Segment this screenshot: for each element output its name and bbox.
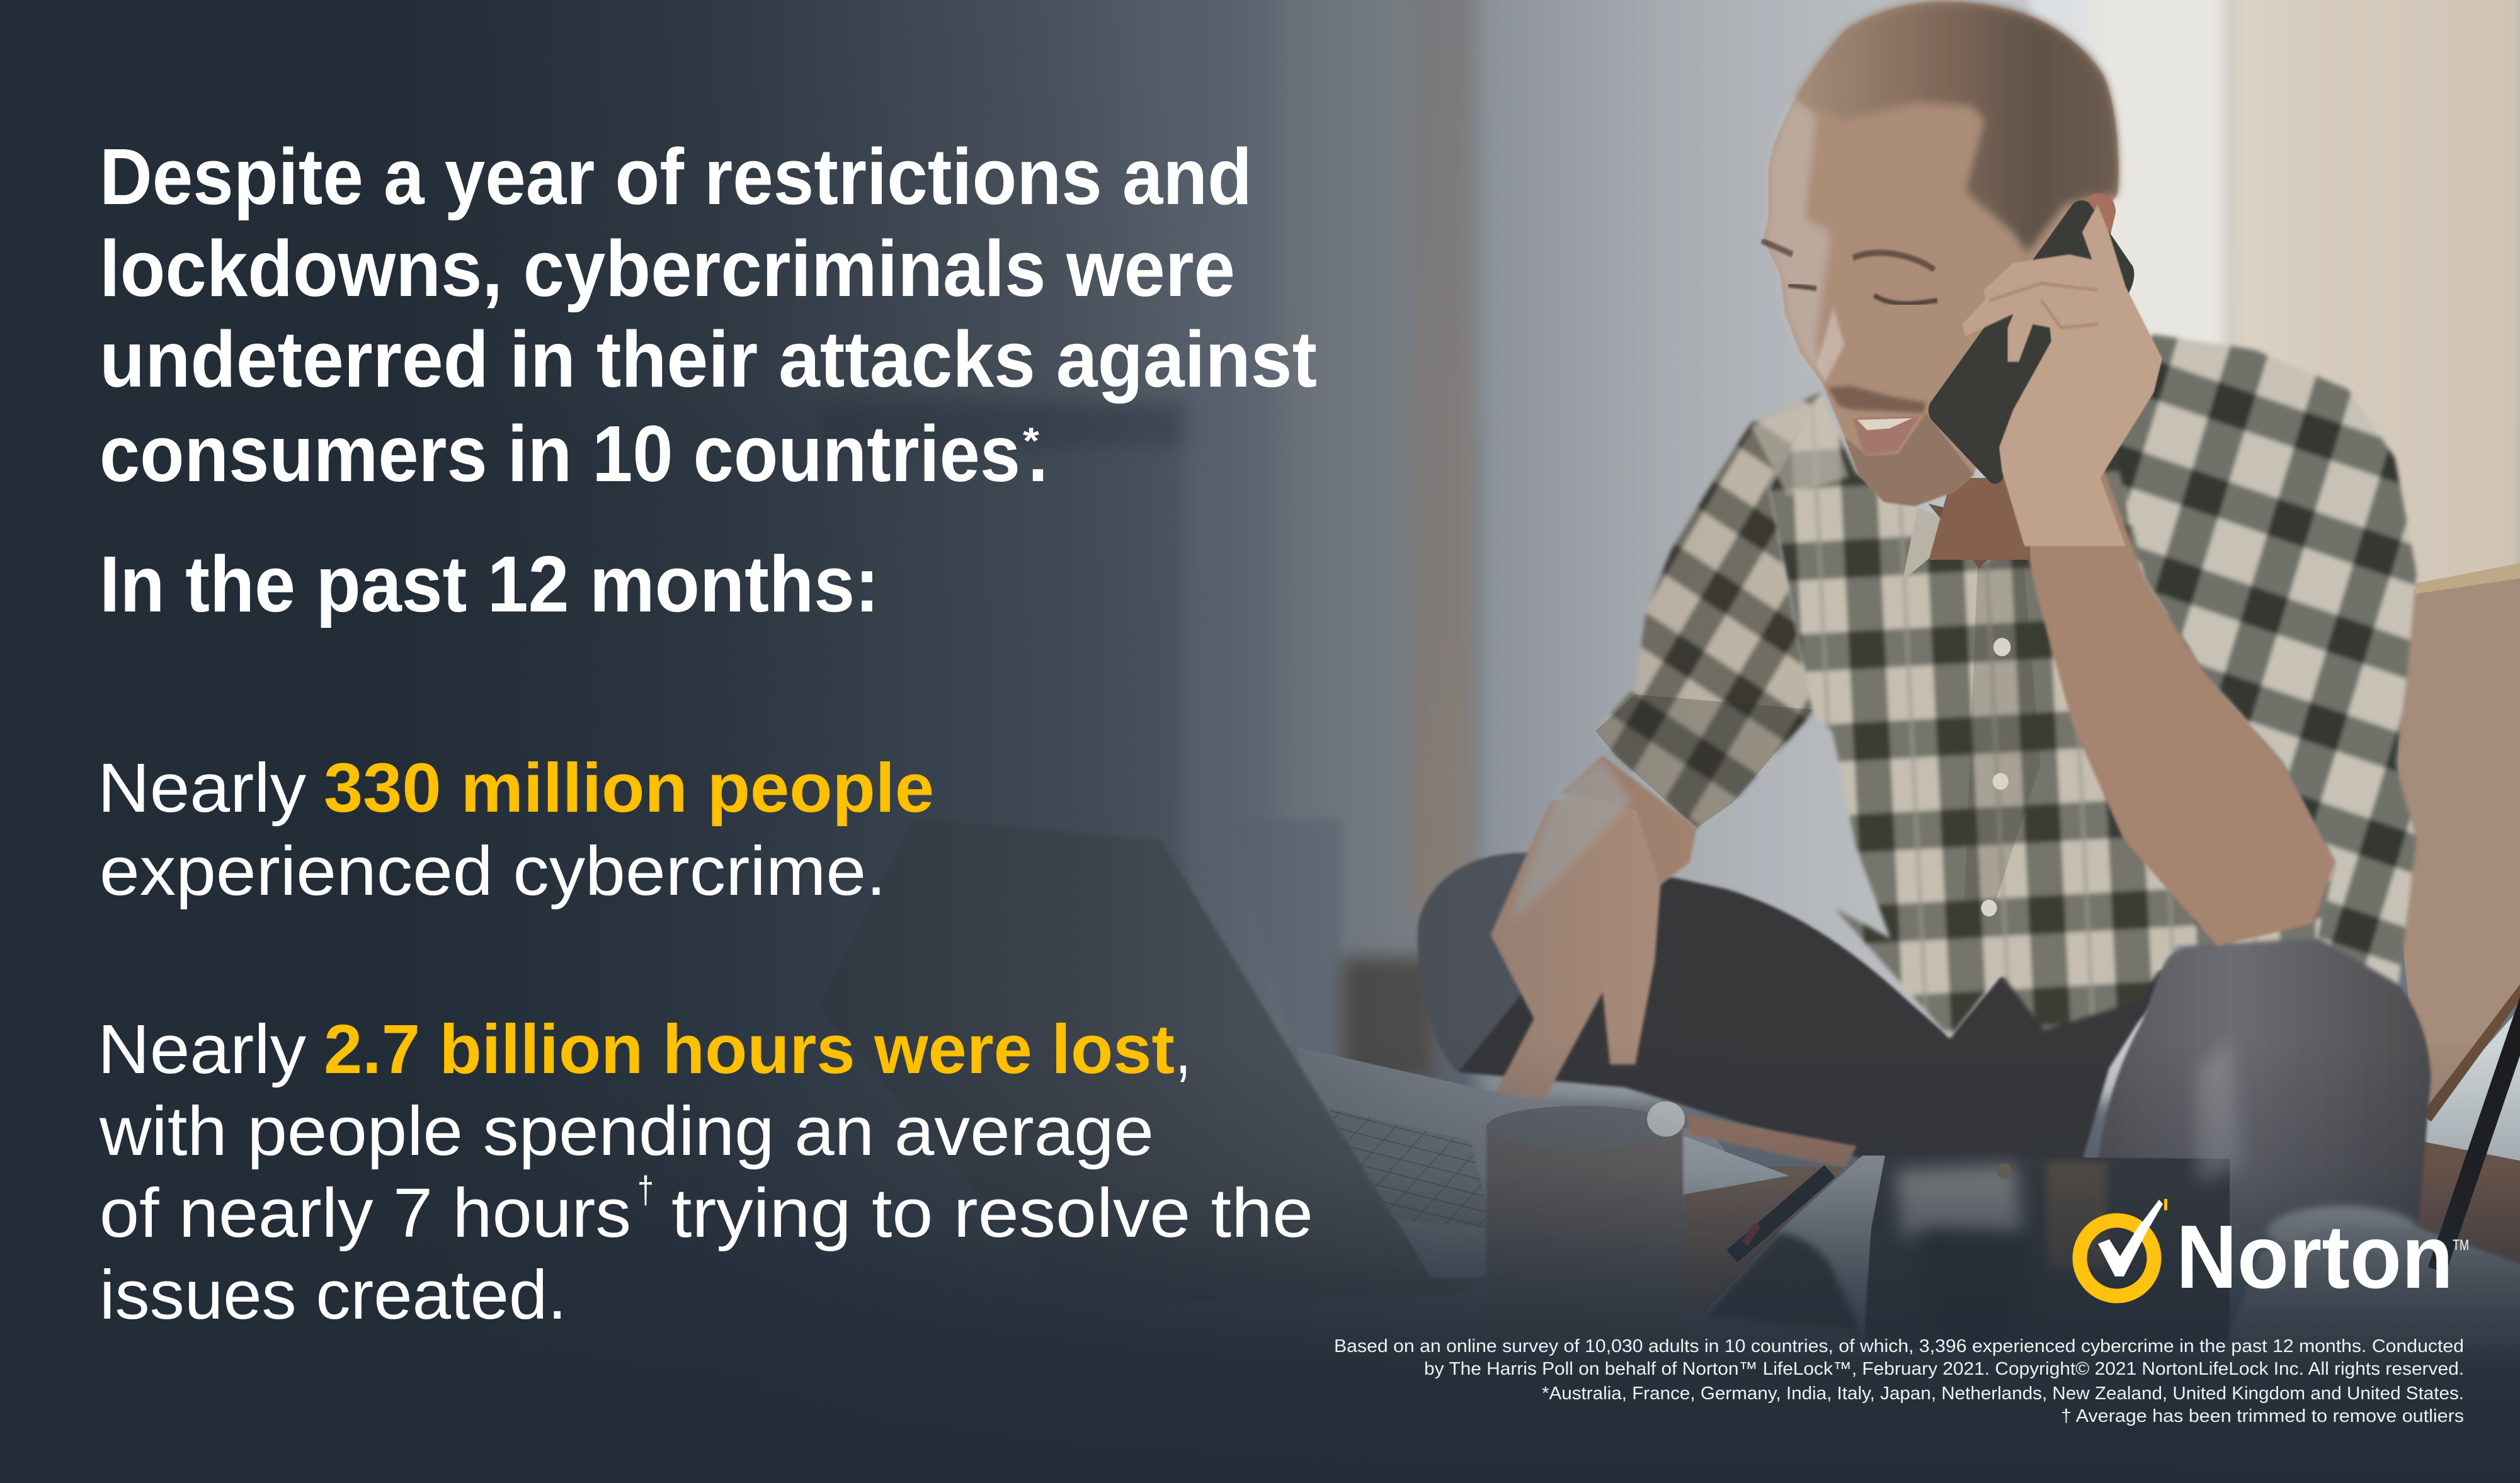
pen	[1732, 1171, 1830, 1256]
reflection brown stripe	[2047, 1162, 2107, 1269]
lips	[1853, 416, 1919, 456]
wordmark: Norton	[2176, 1207, 2453, 1307]
eyes	[1788, 285, 1937, 304]
blue curtain shade	[1184, 0, 1291, 1196]
headline: undeterred in their attacks against	[100, 315, 1317, 404]
window	[2030, 0, 2099, 50]
mug opening	[1486, 1106, 1675, 1149]
headline: lockdowns, cybercriminals were	[100, 224, 1235, 313]
right sleeve	[2109, 334, 2417, 984]
white blob on table	[2267, 1206, 2419, 1256]
hair	[1794, 2, 2118, 253]
tablet edge	[1705, 1156, 1885, 1333]
dark floor behind laptop	[1342, 957, 1436, 1083]
chair leg	[2437, 987, 2520, 1270]
headline	[100, 132, 1317, 498]
nose highlight	[1816, 307, 1845, 382]
dark mouse	[1705, 1232, 1862, 1333]
chair	[2395, 563, 2520, 1122]
window ledge shadow	[819, 403, 1297, 453]
stat: 2.7 billion hours lost: of nearly 7 hours	[100, 1174, 631, 1252]
stat: 2.7 billion hours lost: with people spending an average	[99, 1093, 1154, 1170]
pixel tail tip	[2164, 1199, 2167, 1210]
reflection button	[1997, 1164, 2012, 1179]
footnote: † Average has been trimmed to remove outliers	[2061, 1406, 2464, 1426]
paper	[1677, 1134, 1789, 1195]
ear	[2084, 193, 2116, 236]
body	[1418, 334, 2520, 1251]
hand	[1962, 205, 2162, 546]
moustache	[1828, 386, 1926, 413]
tablet glass reflection	[1864, 1156, 2230, 1348]
pen red mark	[1745, 1225, 1757, 1244]
headline: .	[1028, 409, 1048, 498]
arm rest tan strip	[1688, 1115, 1857, 1167]
stat: 2.7 billion hours lost: issues created.	[100, 1256, 567, 1334]
stat: 330 million people: Nearly	[98, 749, 306, 827]
face	[1763, 2, 2118, 506]
head phone and hand	[1762, 2, 2162, 560]
trousers	[1418, 853, 2181, 1168]
logo ring	[2080, 1220, 2154, 1296]
beige wall	[2226, 0, 2520, 730]
stat: 330 million people	[98, 749, 934, 910]
laptop keyboard	[1296, 1047, 1726, 1278]
buttons	[1981, 638, 2010, 916]
wood table	[1675, 1167, 1845, 1312]
headline: *	[1023, 421, 1039, 462]
stat: 2.7 billion hours lost: trying to resolve the	[671, 1174, 1313, 1252]
teeth	[1857, 418, 1912, 430]
trademark: TM	[2453, 1237, 2469, 1254]
left curtain	[1279, 0, 1480, 1134]
shirt torso	[1769, 393, 2335, 1038]
collar flap	[1903, 508, 1942, 580]
table items	[819, 819, 2520, 1483]
headline: consumers in 10 countries	[100, 409, 1020, 498]
stat: 2.7 billion hours lost: ,	[1175, 1011, 1191, 1088]
subheading: In the past 12 months:	[100, 540, 879, 628]
raised arm	[2014, 465, 2335, 946]
stat: 2.7 billion hours lost: Nearly	[98, 1011, 306, 1088]
reflection dark folds	[1921, 1237, 2028, 1344]
footnote: by The Harris Poll on behalf of Norton™ LifeLock™, February 2021. Copyright© 2021 NortonLifeLock Inc. All rights reserved.	[1424, 1359, 2464, 1379]
hand highlight	[1508, 759, 1632, 923]
neck shadow	[1928, 504, 2022, 569]
bottom right surface	[2173, 1225, 2520, 1483]
headline: Despite a year of restrictions and	[100, 132, 1252, 221]
laptop lid	[819, 819, 1481, 1304]
mug body	[1486, 1111, 1683, 1341]
sleeve cuff shadow	[1595, 695, 1813, 828]
collar	[1751, 397, 1849, 496]
bright curtain	[2089, 0, 2234, 441]
neck	[1929, 478, 2030, 560]
chin stubble	[1845, 413, 1974, 506]
knee	[2096, 934, 2431, 1251]
brows	[1762, 241, 1934, 270]
wall	[1477, 0, 2170, 1102]
logo check mark	[2098, 1222, 2150, 1276]
brown floor	[2420, 1141, 2520, 1322]
footnote	[1334, 1336, 2464, 1426]
pixel tail	[2140, 1200, 2163, 1228]
man on the phone	[1418, 2, 2520, 1251]
finger creases	[1989, 283, 2097, 327]
reflection light patch	[1896, 1165, 2022, 1241]
left forearm and pointing hand	[1491, 756, 1697, 1099]
lit face rim	[1763, 96, 1830, 382]
footnote: *Australia, France, Germany, India, Italy, Japan, Netherlands, New Zealand, United Kingdom and United States.	[1542, 1384, 2464, 1404]
stat: 2.7 billion hours lost	[98, 1011, 1313, 1334]
mug knob	[1647, 1101, 1685, 1137]
phone	[1929, 200, 2134, 484]
keys	[1329, 1108, 1493, 1228]
white floor wedge	[2420, 1001, 2520, 1162]
stat: 330 million people: experienced cybercrime.	[100, 832, 886, 910]
footnote: Based on an online survey of 10,030 adults in 10 countries, of which, 3,396 experienced cybercrime in the past 12 months. Conducted	[1334, 1336, 2464, 1356]
stat: 330 million people: 330 million people	[324, 749, 934, 827]
placket shade	[1964, 545, 2040, 908]
left sleeve	[1595, 393, 1820, 828]
knee highlight	[2198, 1039, 2242, 1184]
lower wall behind laptop	[1234, 819, 1342, 1058]
stat: 2.7 billion hours lost: †	[637, 1169, 654, 1211]
stat: 2.7 billion hours lost: 2.7 billion hours were lost	[324, 1011, 1175, 1088]
Norton logo	[2080, 1199, 2469, 1307]
